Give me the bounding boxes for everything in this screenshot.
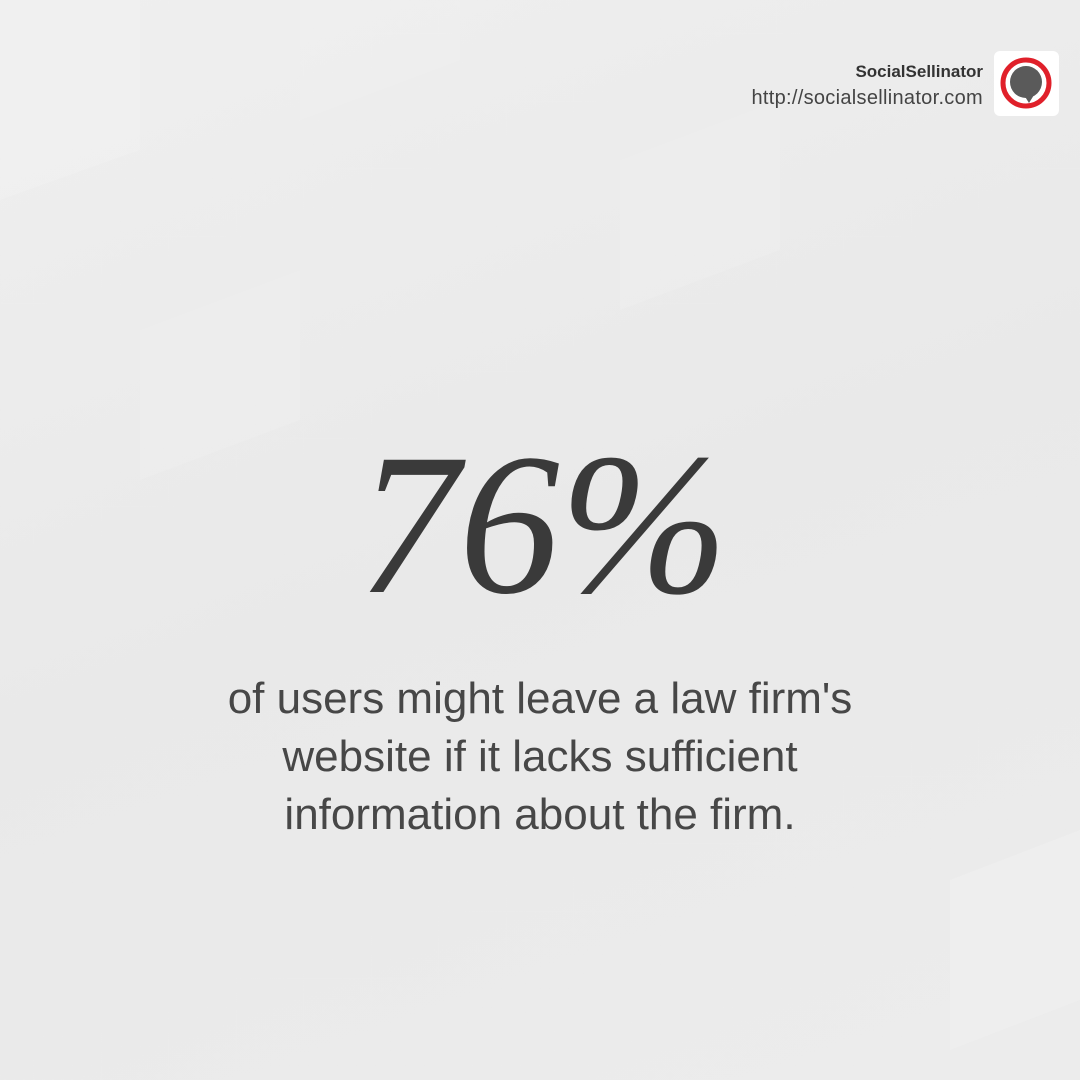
description text bbox=[228, 674, 852, 839]
brand header: SocialSellinator bbox=[855, 62, 983, 81]
description text: website if it lacks sufficient bbox=[282, 732, 798, 781]
headline number: 76% bbox=[358, 412, 728, 636]
brand header bbox=[751, 62, 983, 109]
brand header: http://socialsellinator.com bbox=[751, 87, 983, 109]
icon: logo bbox=[994, 51, 1059, 116]
description text: of users might leave a law firm's bbox=[228, 674, 852, 723]
description text: information about the firm. bbox=[284, 790, 796, 839]
